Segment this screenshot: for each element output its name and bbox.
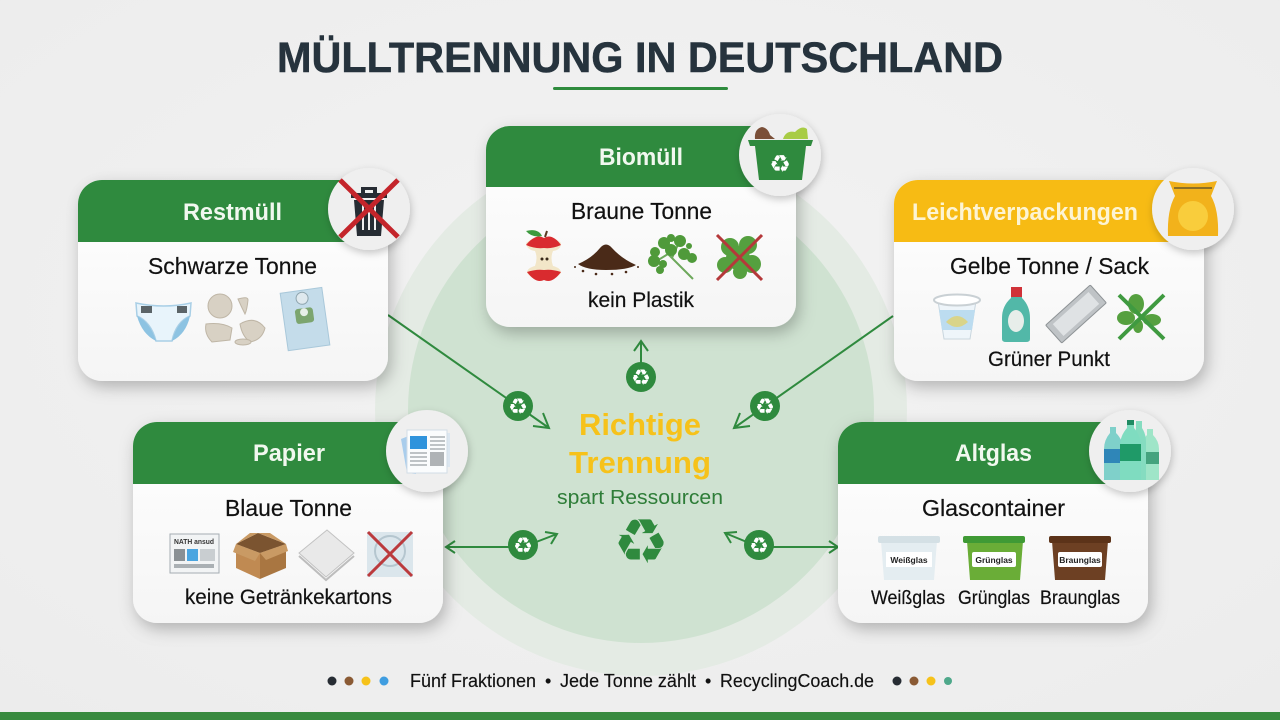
arrow: Altglas and center: ♻ xyxy=(749,534,769,559)
badge: glass bottles xyxy=(1089,410,1171,492)
icon: white glass container xyxy=(878,536,940,580)
left legend dots xyxy=(328,676,388,686)
icon: mixed residual waste xyxy=(206,294,265,345)
label: Braunglas: Braunglas xyxy=(1040,588,1120,609)
title: MÜLLTRENNUNG IN DEUTSCHLAND xyxy=(277,34,1003,82)
heading: Papier: Papier xyxy=(253,440,325,467)
note: kein Plastik: kein Plastik xyxy=(588,289,694,312)
footer line xyxy=(328,671,952,691)
title underline xyxy=(553,87,728,90)
bin type: Blaue Tonne: Blaue Tonne xyxy=(225,495,352,521)
note: keine Getränkekartons: keine Getränkekartons xyxy=(185,586,392,609)
icon: cardboard box xyxy=(233,533,288,579)
panel: Altglas xyxy=(838,410,1171,623)
footer text: Fünf Fraktionen xyxy=(410,671,536,691)
panel: Papier xyxy=(133,410,468,623)
icon: yoghurt cup xyxy=(934,294,980,339)
icon: crossed-out greens xyxy=(717,235,762,280)
icon: apple core xyxy=(526,230,561,281)
footer text: RecyclingCoach.de xyxy=(720,671,874,691)
badge: crossed-out bin xyxy=(328,168,410,250)
center message: Richtige xyxy=(579,407,701,442)
arrow: Restmüll to center: ♻ xyxy=(508,395,528,420)
bin type: Glascontainer: Glascontainer xyxy=(922,495,1065,521)
footer text: Jede Tonne zählt xyxy=(560,671,696,691)
icon: newspaper: NATH ansud xyxy=(174,539,214,546)
icon: foil sachet xyxy=(1046,285,1106,343)
arrow: Papier and center xyxy=(446,530,557,560)
icon: detergent bottle xyxy=(1002,287,1030,342)
label: Grünglas: Grünglas xyxy=(958,588,1030,609)
icon: diaper xyxy=(136,303,191,341)
heading: Leichtverpackungen: Leichtverpackungen xyxy=(912,199,1138,226)
arrow: Altglas and center xyxy=(725,530,838,560)
background circles xyxy=(375,144,907,676)
arrow: Papier and center: ♻ xyxy=(513,534,533,559)
icon: green glass container xyxy=(963,536,1025,580)
icon: green glass container: Grünglas xyxy=(975,555,1013,565)
heading: Biomüll: Biomüll xyxy=(599,144,683,171)
heading: Restmüll: Restmüll xyxy=(183,199,282,226)
footer text: • xyxy=(705,671,711,691)
bin type: Schwarze Tonne: Schwarze Tonne xyxy=(148,253,317,279)
note: Grüner Punkt: Grüner Punkt xyxy=(988,348,1110,371)
footer text: • xyxy=(545,671,551,691)
badge: newspaper xyxy=(386,410,468,492)
panel: Leichtverpackungen xyxy=(894,168,1234,381)
icon: crossed-out beverage carton xyxy=(367,532,413,577)
center message: spart Ressourcen xyxy=(557,487,723,509)
center message xyxy=(557,407,723,509)
icon: parsley xyxy=(648,234,697,279)
icon: paper stack xyxy=(299,530,354,580)
panel: Biomüll xyxy=(486,114,821,327)
icon: white glass container: Weißglas xyxy=(890,555,928,565)
label: Weißglas: Weißglas xyxy=(871,588,945,609)
bin type: Gelbe Tonne / Sack: Gelbe Tonne / Sack xyxy=(950,253,1149,279)
icon: recycling symbol: ♻ xyxy=(613,505,669,578)
icon: newspaper xyxy=(170,534,219,573)
arrow: Restmüll to center xyxy=(388,315,549,428)
icon: soil xyxy=(574,244,639,275)
badge: yellow sack xyxy=(1152,168,1234,250)
bottom bar xyxy=(0,712,1280,720)
badge: green bio bin: ♻ xyxy=(769,150,791,178)
panel: Restmüll xyxy=(78,168,410,381)
right legend dots xyxy=(892,676,952,686)
arrow: center to Biomüll: ♻ xyxy=(631,366,651,391)
heading: Altglas: Altglas xyxy=(955,440,1032,467)
bin type: Braune Tonne: Braune Tonne xyxy=(571,198,712,224)
icon: vacuum bag xyxy=(280,287,330,351)
icon: brown glass container xyxy=(1049,536,1111,580)
arrow: Leichtverpackungen to center: ♻ xyxy=(755,395,775,420)
badge: green bio bin xyxy=(739,114,821,196)
center message: Trennung xyxy=(569,445,711,480)
arrow: center to Biomüll xyxy=(626,341,656,392)
icon: brown glass container: Braunglas xyxy=(1059,555,1101,565)
arrow: Leichtverpackungen to center xyxy=(734,316,893,428)
icon: crossed-out leaves xyxy=(1117,294,1164,339)
